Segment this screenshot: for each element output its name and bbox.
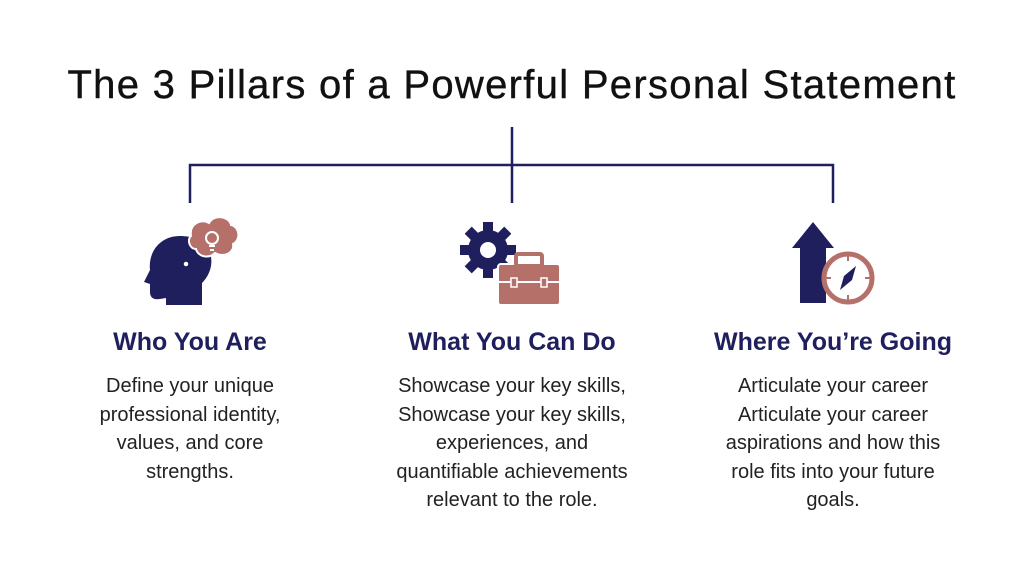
pillar: who you are — [100, 328, 280, 483]
pillar: where you're going: Articulate your career — [738, 375, 928, 397]
pillar: who you are: professional identity, — [100, 404, 280, 426]
pillar: what you can do: relevant to the role. — [426, 489, 598, 511]
pillar: who you are: Define your unique — [106, 375, 274, 397]
icon: gear and briefcase — [460, 222, 560, 305]
pillar: who you are: values, and core — [117, 432, 263, 454]
pillar: where you're going — [714, 328, 952, 511]
icon: head with idea — [144, 217, 238, 305]
pillar: what you can do: Showcase your key skills, — [398, 404, 626, 426]
pillar: what you can do — [396, 328, 628, 511]
pillar: where you're going: goals. — [806, 489, 860, 511]
pillar: where you're going: Where You’re Going — [714, 328, 952, 356]
title: The 3 Pillars of a Powerful Personal Statement — [67, 63, 957, 107]
pillar: what you can do: What You Can Do — [408, 328, 616, 356]
pillar: what you can do: experiences, and — [436, 432, 588, 454]
pillar: who you are: strengths. — [146, 461, 234, 483]
pillar: where you're going: role fits into your future — [731, 461, 935, 483]
pillar: where you're going: Articulate your career — [738, 404, 928, 426]
pillar: where you're going: aspirations and how this — [726, 432, 940, 454]
pillar: what you can do: quantifiable achievements — [396, 461, 628, 483]
icon: arrow and compass — [792, 222, 872, 303]
pillar: who you are: Who You Are — [113, 328, 267, 356]
pillar: what you can do: Showcase your key skills, — [398, 375, 626, 397]
